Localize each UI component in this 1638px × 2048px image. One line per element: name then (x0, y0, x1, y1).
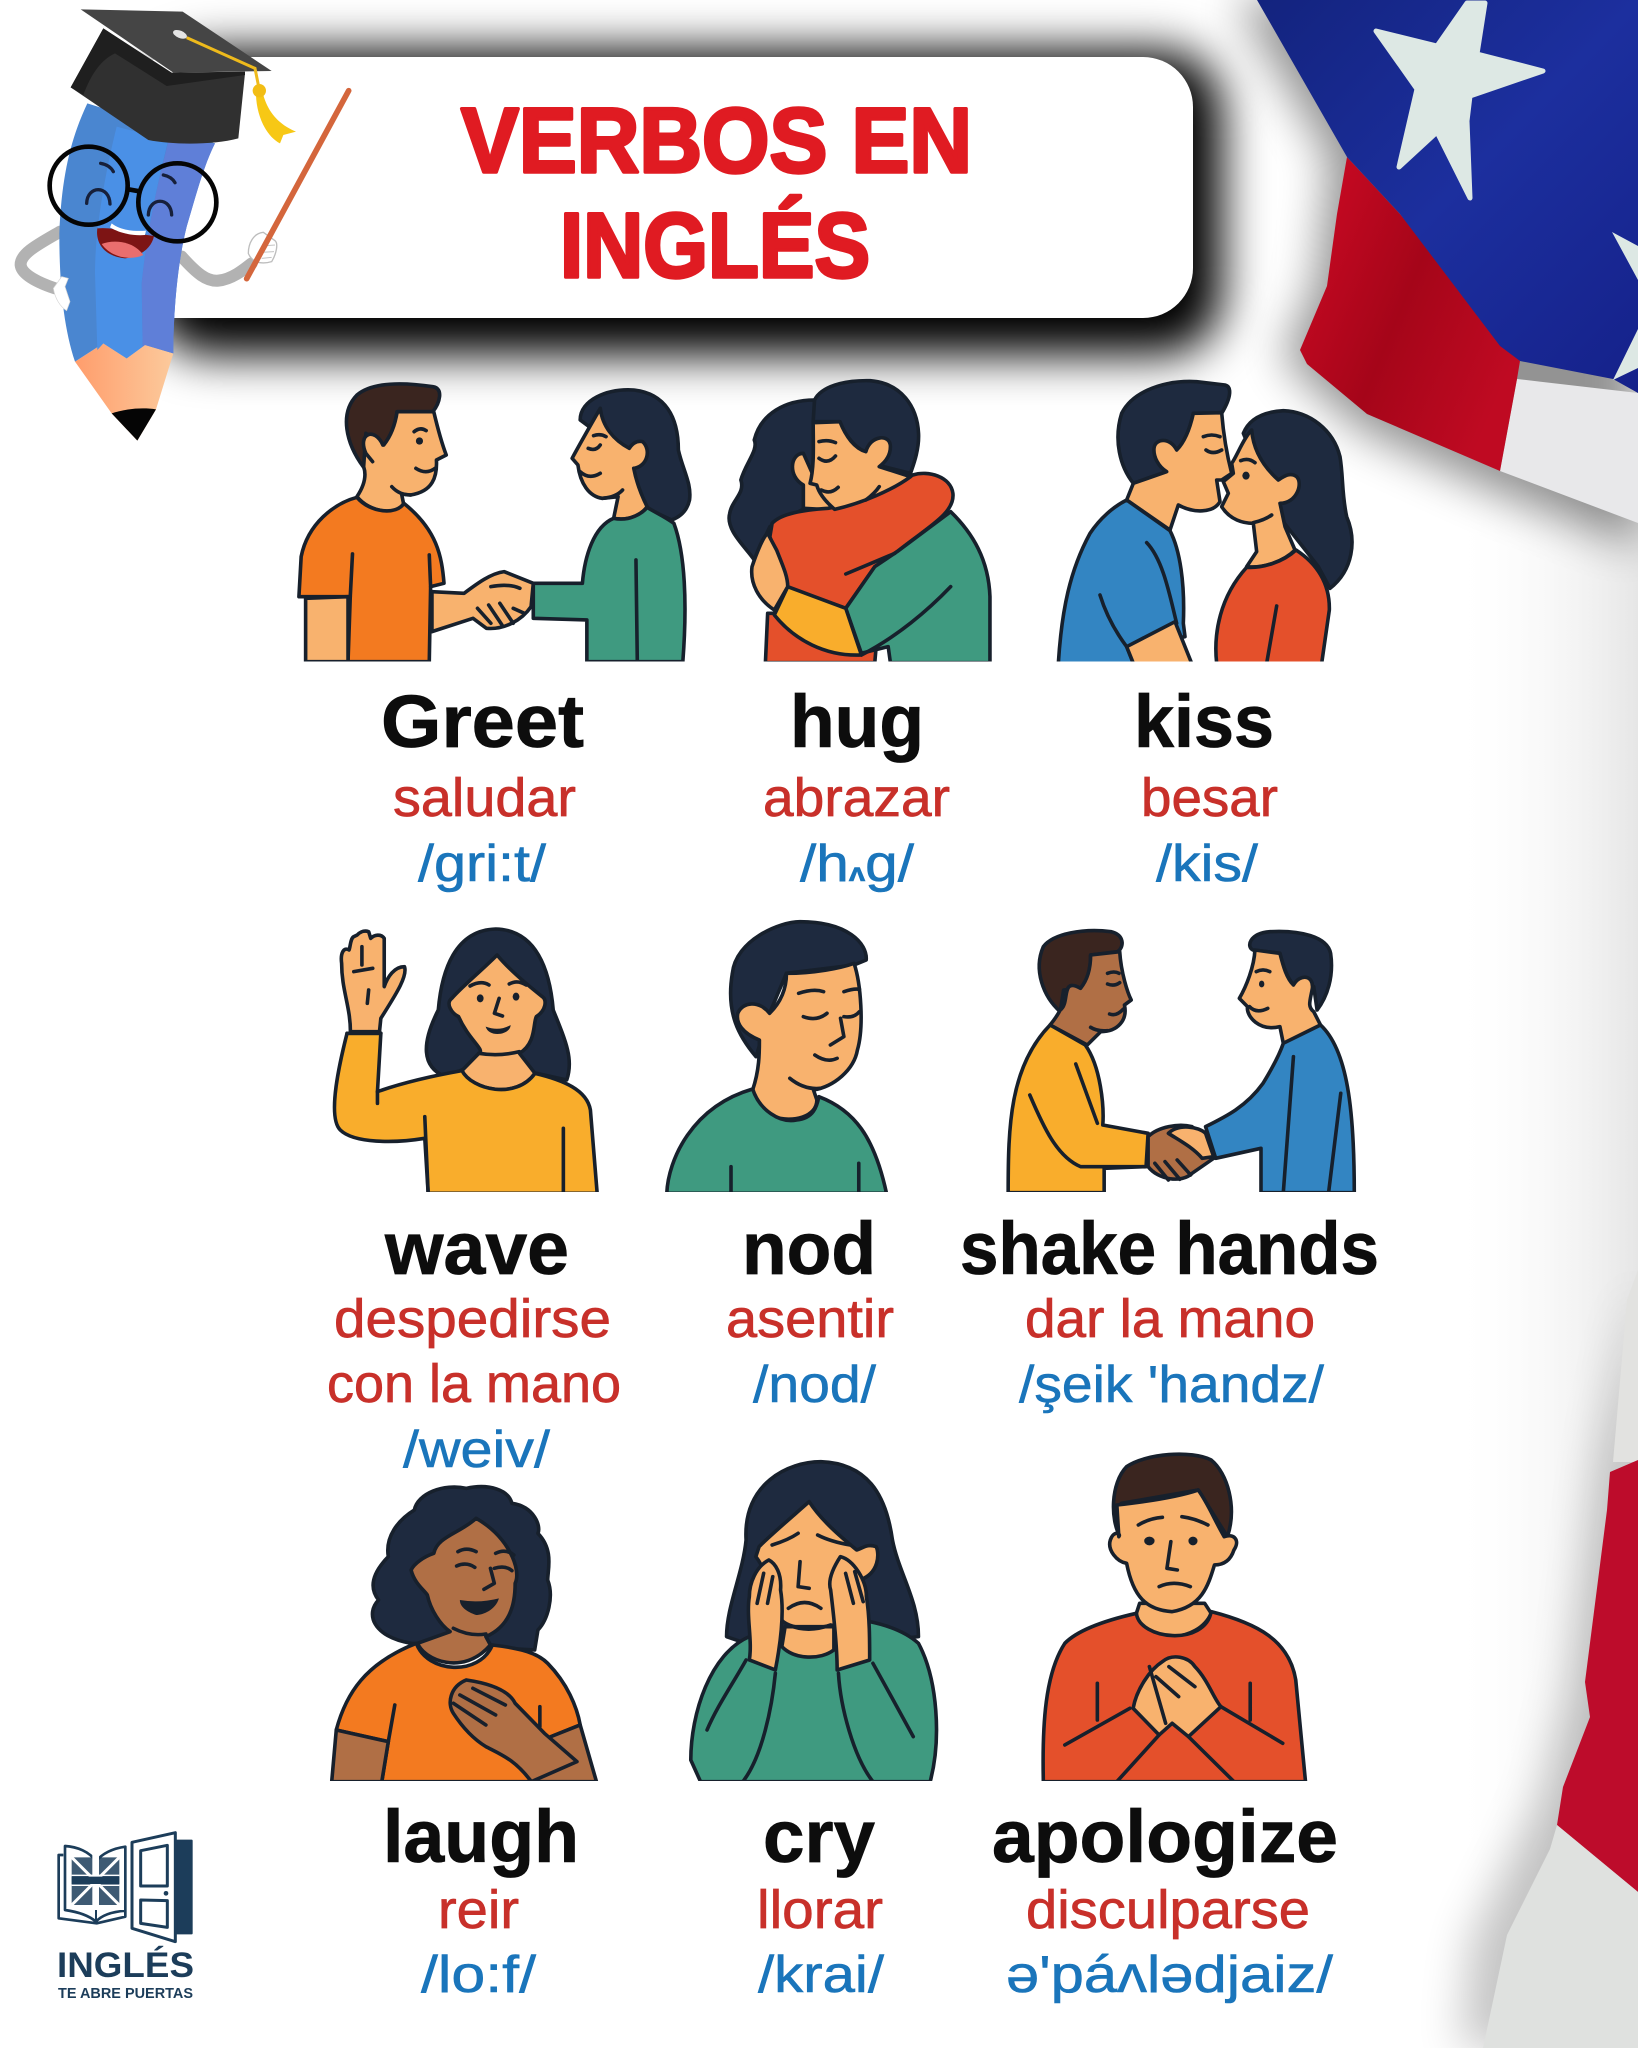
hat underside (71, 28, 245, 95)
lower flag shadow (1460, 1280, 1638, 2048)
verb: wave (327, 1207, 621, 1479)
woman (1216, 411, 1352, 663)
arms (21, 232, 252, 288)
logo tagline: TE ABRE PUERTAS (58, 1985, 193, 2002)
verb: nod (726, 1207, 894, 1414)
pencil lead (112, 408, 156, 441)
white stripe (1500, 379, 1638, 523)
pointer stick (247, 91, 349, 279)
verb: Greet: /gri:t/ (418, 835, 547, 893)
verb: shake hands (960, 1207, 1379, 1414)
verb: cry: llorar (757, 1880, 883, 1940)
verb: wave: despedirse (334, 1289, 611, 1349)
hand on chest (450, 1680, 577, 1782)
glasses (50, 147, 216, 241)
lower red (765, 613, 877, 663)
man hair (813, 381, 919, 473)
book (59, 1846, 125, 1923)
waving hand (341, 931, 405, 1032)
verb: Greet: saludar (393, 768, 576, 828)
verb: laugh: laugh (383, 1795, 579, 1878)
figure bottom trims row 1 (290, 662, 1380, 666)
verb: apologize: apologize (992, 1795, 1338, 1878)
happy eyes (87, 163, 175, 215)
figure: shake hands (1008, 931, 1354, 1193)
verb: nod: /nod/ (753, 1356, 877, 1414)
handshake (432, 572, 533, 632)
left man (1008, 931, 1148, 1193)
white strip (1613, 1270, 1638, 1462)
white hem (1483, 1825, 1638, 2048)
verb: nod: asentir (726, 1289, 894, 1349)
title line 1: VERBOS EN (461, 90, 972, 192)
verb: laugh (383, 1795, 579, 2004)
man (1058, 381, 1232, 663)
flag shadow (1235, 0, 1638, 545)
woman hair (729, 400, 815, 560)
verb: wave: /weiv/ (403, 1421, 551, 1479)
verb: apologize: ə'páʌlədjaiz/ (1006, 1946, 1334, 2004)
right man (1206, 931, 1354, 1193)
right side soft shade (1450, 400, 1638, 2048)
hat board (81, 9, 272, 73)
hat base (71, 28, 245, 144)
body centre stripe (95, 127, 168, 358)
hands on face (748, 1560, 782, 1670)
red sweater and arm (770, 473, 953, 608)
red stripe (1300, 157, 1520, 471)
title (461, 90, 972, 297)
tassel (187, 38, 259, 90)
verb: wave: con la mano (327, 1354, 621, 1414)
verb: hug: abrazar (763, 768, 950, 828)
yellow sleeve (774, 587, 861, 655)
figure: apologize (1043, 1454, 1306, 1782)
verb: cry: /krai/ (758, 1946, 885, 2004)
left hand (53, 277, 70, 311)
man face (810, 422, 910, 509)
logo (59, 1833, 192, 1942)
clasped hands (1133, 1657, 1221, 1737)
pencil body (59, 103, 215, 362)
figure bottom trims row 2 (320, 1192, 1390, 1197)
verb: apologize: disculparse (1026, 1880, 1310, 1940)
verb: kiss: besar (1141, 768, 1278, 828)
pencil mascot (21, 9, 349, 441)
figure: wave (334, 929, 597, 1193)
partial stars (1612, 232, 1638, 380)
verb: kiss: /kis/ (1156, 835, 1259, 893)
flag top right (1257, 0, 1638, 523)
mouth (97, 228, 154, 258)
logo word: INGLÉS (57, 1945, 194, 1985)
verb: laugh: /lo:f/ (421, 1946, 537, 2004)
verb: wave: wave (384, 1207, 569, 1290)
verb: laugh: reir (438, 1880, 519, 1940)
figure: cry (691, 1462, 936, 1782)
pencil wood tip (75, 343, 173, 441)
verb: hug (763, 680, 950, 893)
red fold (1557, 1460, 1638, 1892)
door (132, 1833, 175, 1942)
body right stripe (142, 142, 215, 353)
verb: hug: hug (790, 680, 924, 763)
man body (846, 512, 990, 663)
verb: kiss (1134, 680, 1278, 893)
hands (1148, 1125, 1214, 1180)
verb: kiss: kiss (1134, 680, 1274, 763)
verb: shake hands: /şeik 'handz/ (1019, 1356, 1325, 1414)
verb: Greet: Greet (381, 680, 584, 763)
verb: apologize (992, 1795, 1338, 2004)
verb: cry (757, 1795, 885, 2004)
banner (120, 57, 1193, 318)
figure bottom trims row 3 (320, 1781, 1340, 1786)
star (1376, 3, 1543, 198)
title line 2: INGLÉS (560, 194, 870, 297)
logo text (57, 1945, 194, 2002)
figure: nod (667, 922, 886, 1193)
figure: hug (729, 381, 990, 663)
figure: laugh (332, 1487, 596, 1782)
verb: Greet (381, 680, 584, 893)
verb: hug: /hʌg/ (800, 835, 915, 893)
figure: kiss (1058, 381, 1352, 663)
union flag (72, 1857, 119, 1905)
man (299, 384, 446, 662)
verb: nod: nod (742, 1207, 876, 1290)
flag bottom right (1483, 1270, 1638, 2048)
woman face part (792, 453, 835, 510)
blue canton (1257, 0, 1638, 393)
verb: shake hands: dar la mano (1025, 1289, 1315, 1349)
woman (533, 390, 690, 662)
banner shadow (150, 50, 1222, 355)
hand (752, 533, 788, 610)
figure: greet (299, 384, 690, 662)
verb: shake hands: shake hands (960, 1207, 1379, 1290)
door frame (177, 1841, 192, 1933)
right hand (248, 232, 277, 263)
verb: cry: cry (763, 1795, 875, 1878)
